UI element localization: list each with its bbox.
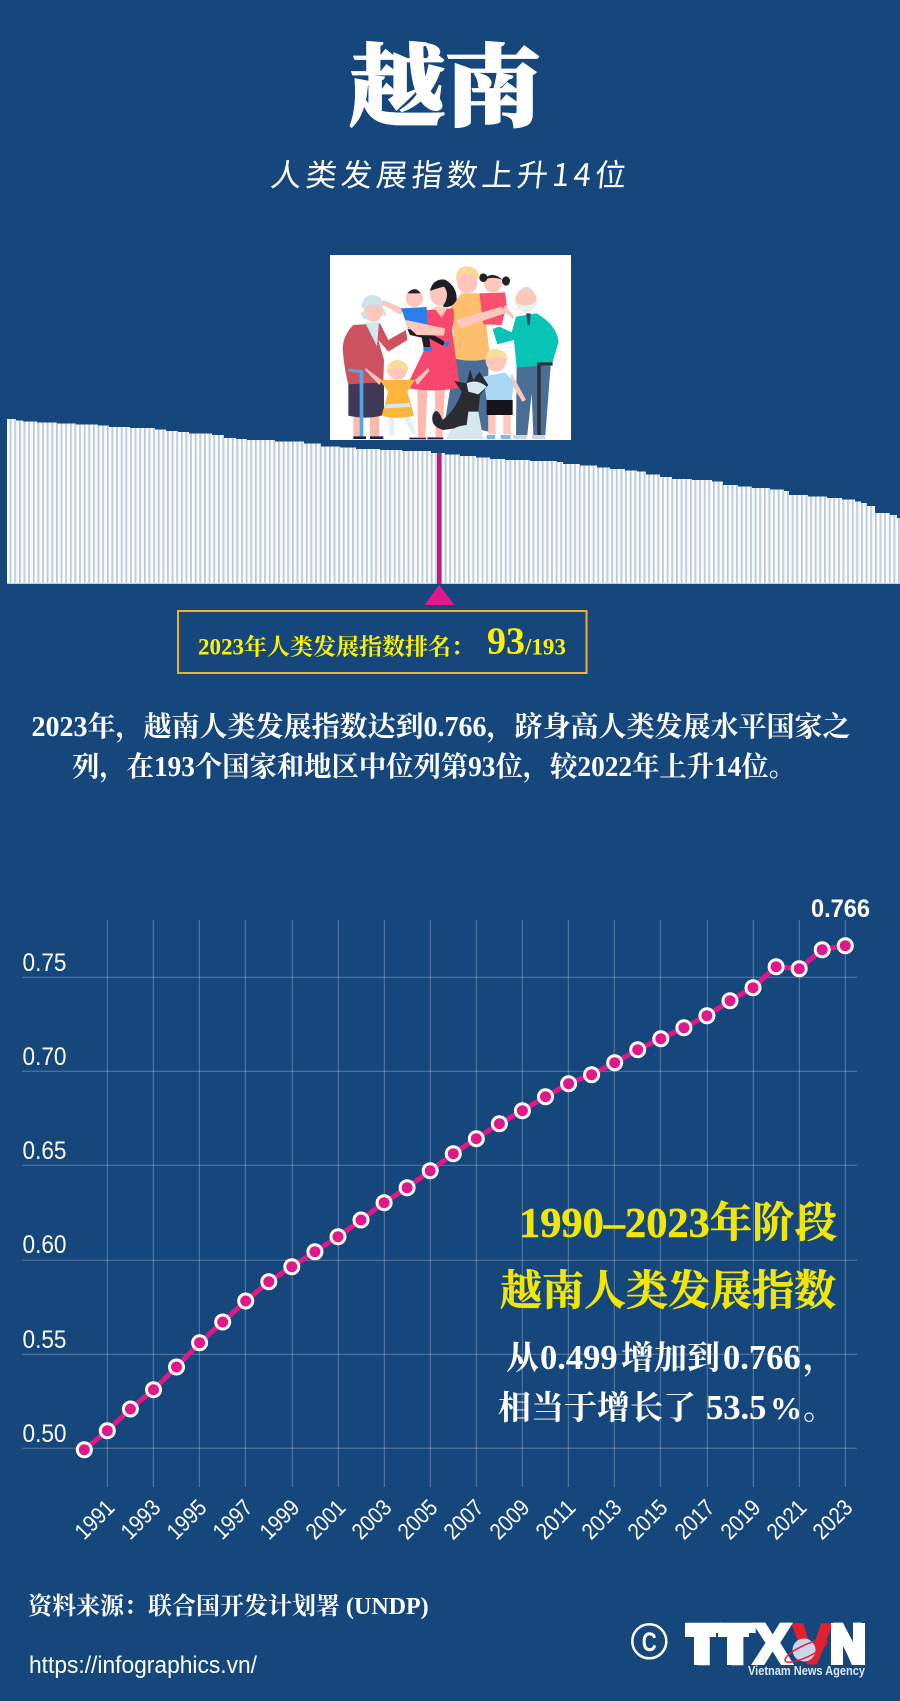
callout: chart heading: 越南人类发展指数	[500, 1268, 836, 1315]
url: https://infographics.vn/	[29, 1652, 257, 1679]
x axis labels: 2003	[346, 1494, 397, 1544]
x axis labels: 2015	[622, 1494, 673, 1544]
end value label: 0.766	[811, 895, 870, 923]
text block: summary: 列，在193个国家和地区中位列第93位，较2022年上升14位。	[72, 751, 796, 783]
y axis labels: 0.50	[22, 1420, 66, 1448]
x axis labels	[69, 1494, 858, 1544]
logo: TTXVN: Vietnam News Agency	[748, 1663, 866, 1678]
callout: growth text: 增加到	[621, 1340, 720, 1377]
figure: mother	[406, 280, 460, 439]
x axis labels: 2013	[576, 1494, 627, 1544]
x axis labels: 1993	[115, 1494, 166, 1544]
y axis labels	[22, 949, 66, 1448]
figure: baby	[382, 289, 450, 351]
marker: Vietnam bar	[437, 453, 442, 584]
figure: dog	[432, 369, 488, 439]
callout: growth text: 53.5	[706, 1389, 766, 1427]
figure: boy	[483, 349, 526, 439]
logo: TTXVN: TTX	[687, 1612, 791, 1675]
figure: little girl	[365, 360, 429, 436]
y axis labels: 0.70	[22, 1043, 66, 1071]
y axis labels: 0.60	[22, 1231, 66, 1259]
callout: chart heading	[500, 1200, 837, 1315]
icon: copyright: C	[642, 1627, 657, 1657]
callout: chart heading: 1990–2023年阶段	[519, 1200, 837, 1247]
figure: father and girl	[445, 266, 515, 432]
line chart: HDI 1990-2023	[22, 895, 870, 1544]
text block: summary: 2023年，越南人类发展指数达到0.766，跻身高人类发展水平国家之	[31, 711, 851, 743]
x axis labels: 2017	[669, 1494, 720, 1544]
callout: growth text	[498, 1339, 836, 1427]
x axis labels: 1991	[69, 1494, 120, 1544]
x axis labels: 2001	[300, 1494, 351, 1544]
x axis labels: 2009	[484, 1494, 535, 1544]
x axis labels: 2019	[715, 1494, 766, 1544]
callout: ranking box: 2023年人类发展指数排名：	[198, 634, 474, 660]
callout: growth text: 0.766	[723, 1339, 801, 1377]
x axis labels: 2021	[761, 1494, 812, 1544]
callout: growth text: %	[770, 1390, 802, 1426]
callout: growth text: 。	[803, 1391, 836, 1427]
data line	[84, 946, 845, 1450]
callout: growth text: 相当于增长了	[498, 1390, 696, 1427]
icon: copyright	[632, 1624, 666, 1658]
x axis labels: 1999	[254, 1494, 305, 1544]
x axis labels: 1997	[207, 1494, 258, 1544]
callout: growth text: ，	[803, 1341, 836, 1377]
source: 资料来源：联合国开发计划署 (UNDP)	[28, 1593, 429, 1620]
logo: TTXVN	[685, 1612, 866, 1678]
figure: grandfather	[493, 287, 559, 439]
x axis labels: 2005	[392, 1494, 443, 1544]
data points	[77, 939, 852, 1457]
callout: ranking box: /193	[524, 634, 566, 660]
title: 越南	[349, 16, 541, 145]
subtitle: 人类发展指数上升14位	[269, 150, 633, 195]
illustration: family photo	[330, 255, 571, 440]
y axis labels: 0.55	[22, 1326, 66, 1354]
x axis labels: 2011	[530, 1494, 581, 1544]
logo: TTXVN: V	[793, 1612, 831, 1675]
logo: TTXVN: N	[832, 1612, 863, 1675]
x axis labels: 1995	[161, 1494, 212, 1544]
y axis labels: 0.65	[22, 1137, 66, 1165]
arrow: rank pointer	[424, 585, 454, 605]
text block: summary	[31, 711, 851, 783]
x axis labels: 2023	[807, 1494, 858, 1544]
figure: grandmother	[343, 295, 407, 439]
callout: ranking box: 93	[487, 620, 525, 662]
bar chart: country ranking	[7, 419, 900, 584]
x axis labels: 2007	[438, 1494, 489, 1544]
callout: ranking box	[178, 611, 586, 673]
callout: growth text: 从	[506, 1341, 539, 1377]
y axis labels: 0.75	[22, 949, 66, 977]
callout: growth text: 0.499	[540, 1339, 618, 1377]
